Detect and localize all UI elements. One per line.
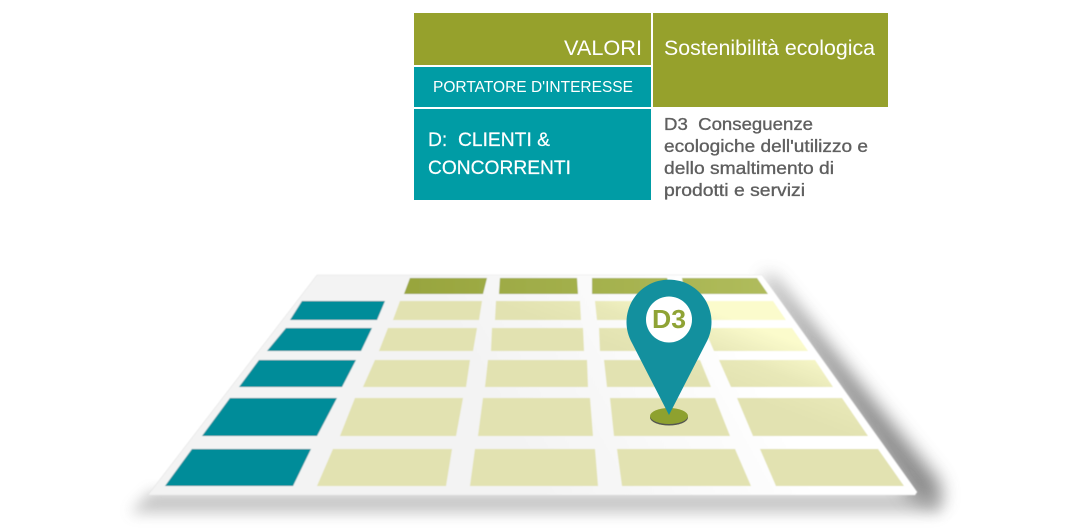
cell: VALORI <box>414 13 651 65</box>
map pin D3 <box>626 280 711 426</box>
cell: D: CLIENTI & CONCORRENTI <box>414 109 651 200</box>
cell: PORTATORE D'INTERESSE: PORTATORE D'INTERESSE <box>433 79 633 96</box>
pin body <box>626 280 711 415</box>
row labels: teal column <box>165 301 385 486</box>
text block: D3 description: ecologiche dell'utilizzo e <box>664 136 868 156</box>
column headers: olive row <box>404 278 768 294</box>
cell: D: CLIENTI & CONCORRENTI: CONCORRENTI <box>428 158 571 179</box>
cell: Sostenibilità ecologica: Sostenibilità ecologica <box>664 37 875 60</box>
cell: Sostenibilità ecologica <box>653 13 888 107</box>
text block: D3 description <box>664 114 868 200</box>
board shadow <box>130 277 942 513</box>
text block: D3 description: dello smaltimento di <box>664 158 834 178</box>
text block: D3 description: D3 Conseguenze <box>664 114 813 134</box>
pin circle with label: D3 <box>652 304 686 334</box>
cell: VALORI: VALORI <box>564 37 642 60</box>
cell: PORTATORE D'INTERESSE <box>414 67 651 107</box>
matrix cells <box>317 301 904 486</box>
pin base ellipse <box>650 408 688 426</box>
table: values and stakeholder header <box>414 13 888 200</box>
cell: D: CLIENTI & CONCORRENTI: D: CLIENTI & <box>428 130 550 151</box>
pin circle with label <box>646 296 692 342</box>
text block: D3 description: prodotti e servizi <box>664 180 805 200</box>
perspective matrix board <box>148 275 917 495</box>
